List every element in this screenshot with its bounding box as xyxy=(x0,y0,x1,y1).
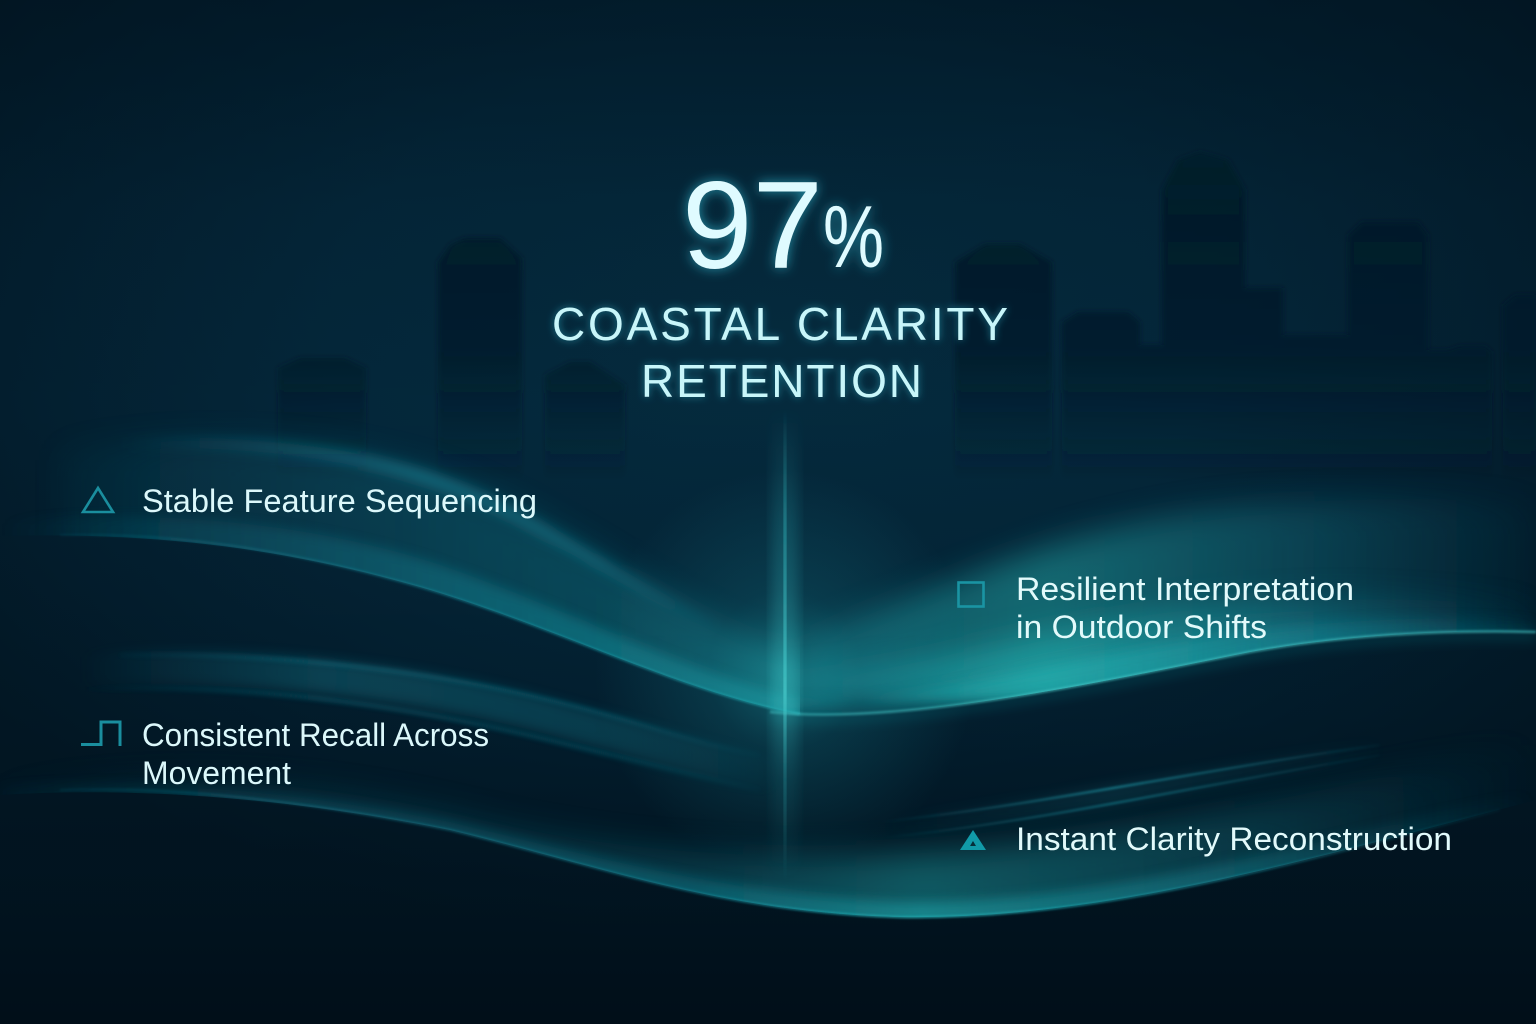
flowing wave: upper right xyxy=(770,499,1536,719)
label: Consistent Recall Across xyxy=(142,717,489,753)
city skyline silhouette xyxy=(278,152,1536,480)
item: Resilient Interpretation in Outdoor Shifts xyxy=(958,571,1354,645)
title: Coastal Clarity Retention: RETENTION xyxy=(641,355,922,407)
item: Instant Clarity Reconstruction xyxy=(960,821,1452,857)
label: Stable Feature Sequencing xyxy=(142,483,537,519)
icon: step pulse xyxy=(81,722,120,746)
item: Stable Feature Sequencing xyxy=(83,483,537,519)
icon: outlined triangle xyxy=(83,488,113,512)
label: Instant Clarity Reconstruction xyxy=(1016,821,1452,857)
item: Consistent Recall Across Movement xyxy=(81,717,489,791)
headline stat: 97%: 97 xyxy=(682,157,823,295)
wisps: lower-right streaks xyxy=(880,745,1380,838)
title: Coastal Clarity Retention xyxy=(552,298,1008,407)
icon: outlined square xyxy=(958,582,984,606)
flowing wave: upper left xyxy=(0,440,800,730)
label: Resilient Interpretation xyxy=(1016,571,1354,607)
headline stat: 97% xyxy=(682,157,884,295)
flowing wave: lower sweep xyxy=(29,776,1500,920)
label: in Outdoor Shifts xyxy=(1016,609,1267,645)
icon: filled triangle xyxy=(960,830,986,850)
wisps: mid-left streaks xyxy=(80,655,780,790)
label: Movement xyxy=(142,755,291,791)
title: Coastal Clarity Retention: COASTAL CLARITY xyxy=(552,298,1008,350)
vertical light beam xyxy=(595,410,975,880)
headline stat: 97%: % xyxy=(823,187,884,286)
